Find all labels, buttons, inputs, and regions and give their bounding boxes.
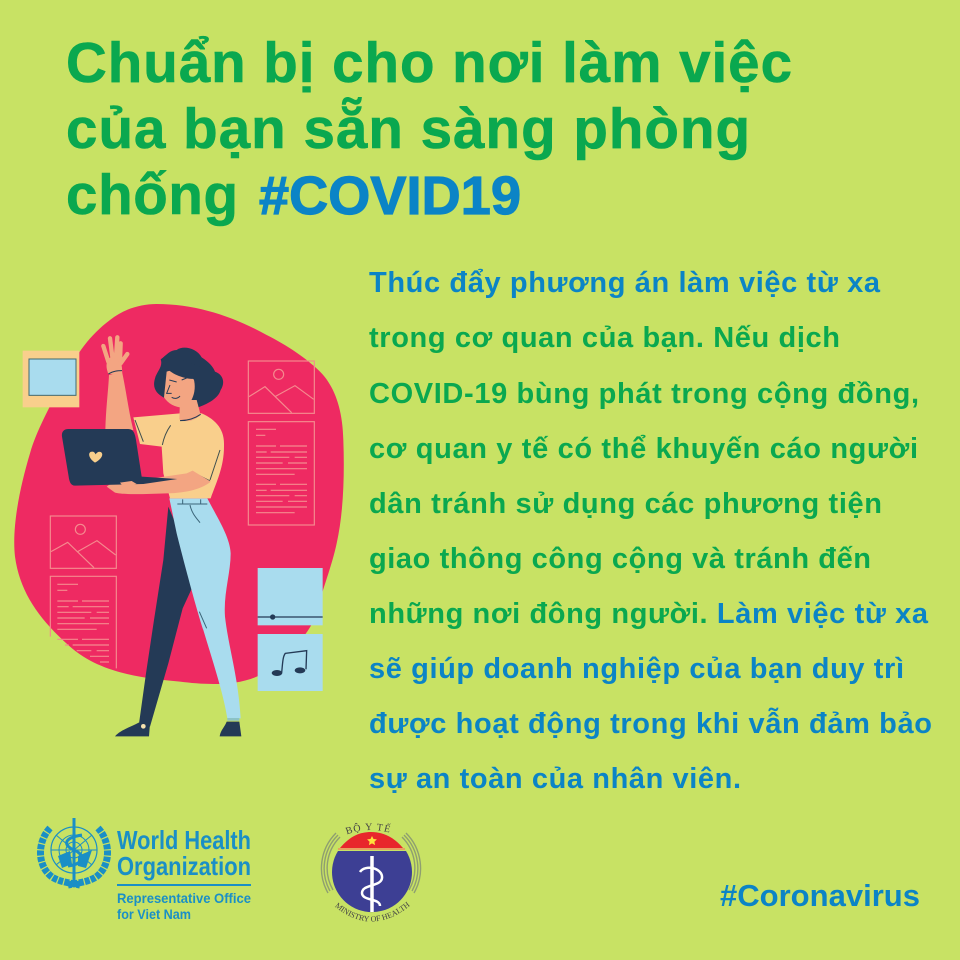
body text: COVID-19 bùng phát trong cộng đồng, bbox=[369, 378, 919, 410]
body text: trong cơ quan của bạn. Nếu dịch bbox=[369, 322, 840, 354]
light shoe bbox=[220, 722, 241, 736]
body text: giao thông công cộng và tránh đến bbox=[369, 543, 871, 575]
WHO name: World Health bbox=[117, 825, 251, 855]
body text bbox=[369, 267, 932, 795]
illustration: woman with laptop bbox=[14, 304, 344, 736]
title: #COVID19 bbox=[259, 166, 521, 226]
neck bbox=[179, 400, 201, 421]
dark trouser leg bbox=[139, 507, 193, 727]
title: của bạn sẵn sàng phòng bbox=[66, 96, 750, 160]
red blob background bbox=[14, 304, 344, 684]
logo: Ministry of Health: BỘ Y TẾ bbox=[345, 822, 391, 834]
light trouser leg bbox=[169, 498, 241, 718]
music card bbox=[258, 634, 323, 691]
body text: cơ quan y tế có thể khuyến cáo người bbox=[369, 433, 918, 465]
dark shoe bbox=[115, 723, 150, 736]
title bbox=[66, 31, 792, 226]
hair back bbox=[154, 348, 223, 407]
raised arm bbox=[103, 337, 133, 430]
logo: World Health Organization: Representative Office bbox=[117, 890, 251, 906]
image and document outlines bbox=[50, 361, 314, 668]
logo: World Health Organization: Organization bbox=[117, 851, 251, 881]
fingers bbox=[120, 481, 137, 487]
shirt bbox=[133, 413, 224, 498]
laptop bbox=[62, 429, 177, 486]
face bbox=[164, 371, 195, 407]
tablet icon bbox=[23, 351, 79, 407]
body text: những nơi đông người. Làm việc từ xa bbox=[369, 598, 929, 630]
title: Chuẩn bị cho nơi làm việc bbox=[66, 31, 792, 94]
logo: World Health Organization bbox=[40, 818, 251, 922]
media player card bbox=[258, 568, 323, 625]
logo: Ministry of Health: MINISTRY OF HEALTH bbox=[334, 902, 410, 922]
body text: được hoạt động trong khi vẫn đảm bảo bbox=[369, 706, 932, 740]
body text: sự an toàn của nhân viên. bbox=[369, 763, 741, 795]
title: chống bbox=[66, 163, 238, 226]
body text: Thúc đẩy phương án làm việc từ xa bbox=[369, 267, 881, 299]
hashtag: #Coronavirus bbox=[720, 878, 920, 913]
lower arm and hand bbox=[107, 471, 211, 494]
WHO emblem bbox=[40, 818, 108, 885]
body text: dân tránh sử dụng các phương tiện bbox=[369, 488, 882, 520]
body text: sẽ giúp doanh nghiệp của bạn duy trì bbox=[369, 653, 904, 685]
logo: World Health Organization: for Viet Nam bbox=[117, 906, 191, 922]
logo: Ministry of Health bbox=[320, 822, 422, 922]
